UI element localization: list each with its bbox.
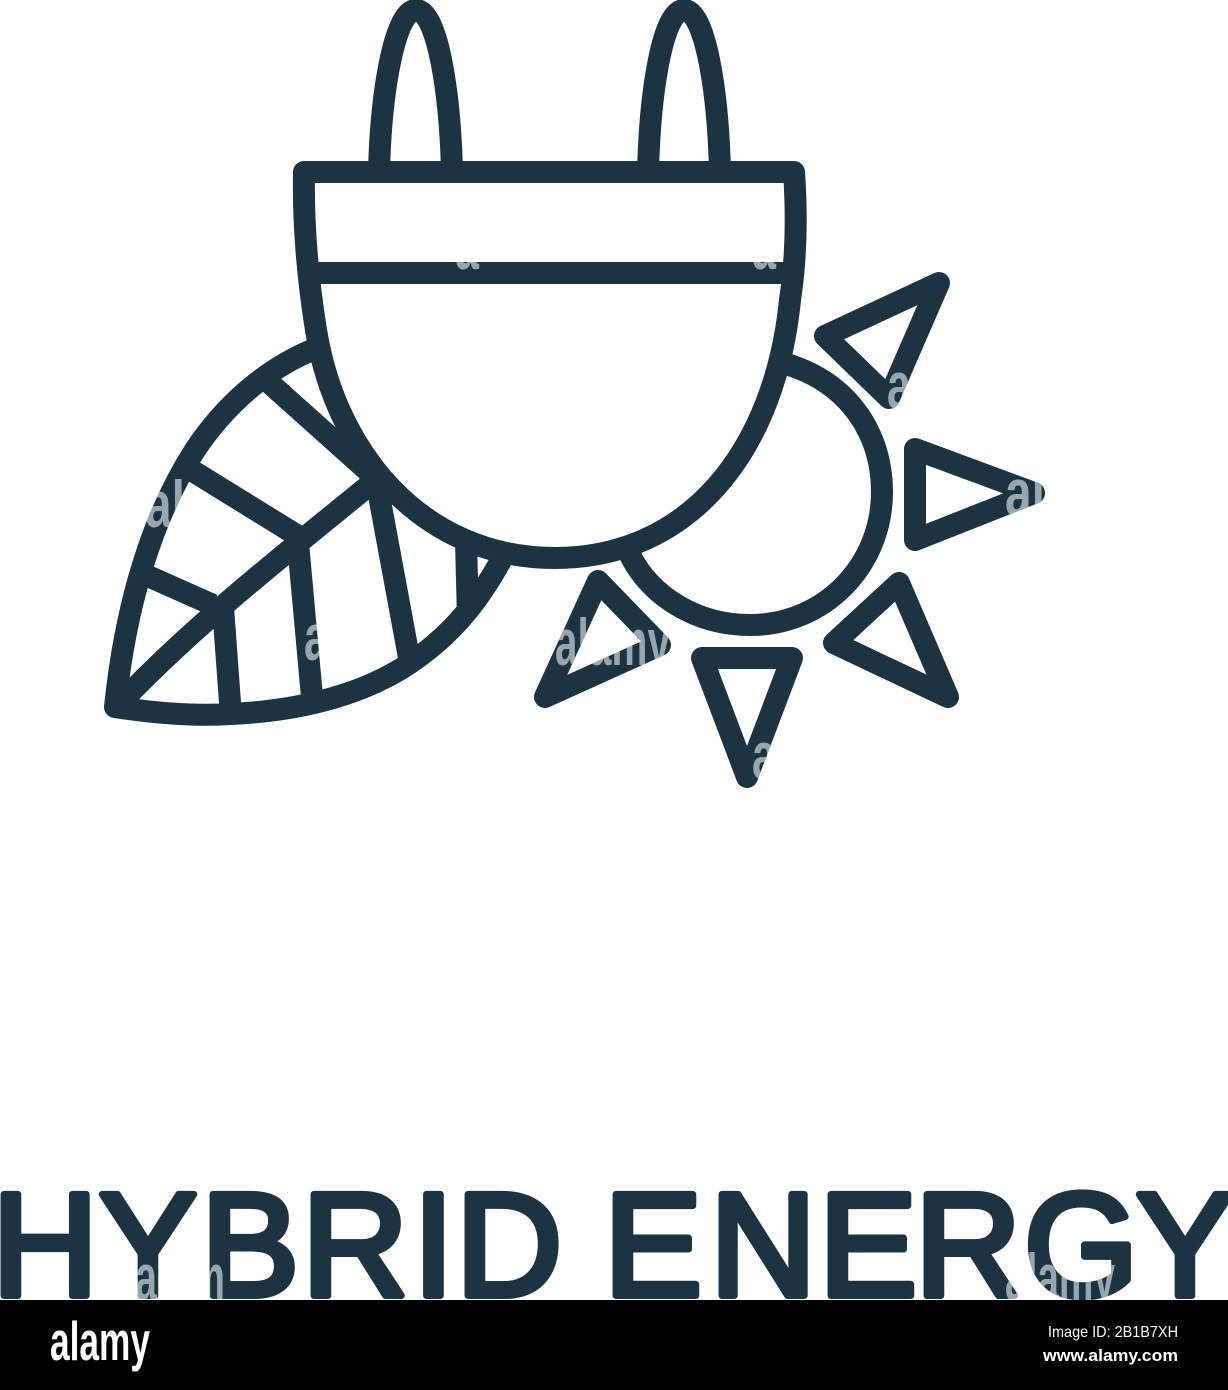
icon: left plug prong [379, 10, 452, 172]
watermark fragments: al [1005, 455, 1045, 529]
icon: right plug prong [648, 10, 720, 172]
icon: sun ray bottom left [545, 581, 660, 697]
watermark fragments [135, 209, 1115, 1314]
icon: sun ray right [915, 449, 1034, 540]
watermark fragments: alamy [555, 605, 670, 679]
watermark fragments: alamy [1005, 1240, 1115, 1314]
image id: Image ID: 2B1B7XH [1048, 1324, 1178, 1341]
icon: sun ray bottom [702, 658, 792, 777]
icon: sun ray top right [825, 283, 939, 398]
icon: leaf [115, 350, 505, 730]
watermark fragments: alam [135, 1240, 225, 1314]
plug body divider [310, 262, 790, 284]
watermark fragments: al [145, 467, 185, 541]
watermark fragments: a [752, 718, 777, 792]
icon: hybrid energy plug with leaf and sun [115, 10, 1034, 777]
watermark fragments: a [887, 348, 912, 422]
icon: plug body [304, 172, 796, 558]
footer bar [0, 1300, 1228, 1390]
title: HYBRID ENERGY [0, 1164, 1228, 1328]
website url: www.alamy.com [1042, 1346, 1178, 1365]
watermark fragments: a [455, 209, 480, 283]
icon: sun disc [630, 363, 882, 625]
icon: sun ray bottom right [834, 583, 948, 697]
footer logo: alamy [50, 1310, 150, 1372]
watermark fragments: a [304, 600, 329, 674]
watermark fragments: a [752, 209, 777, 283]
